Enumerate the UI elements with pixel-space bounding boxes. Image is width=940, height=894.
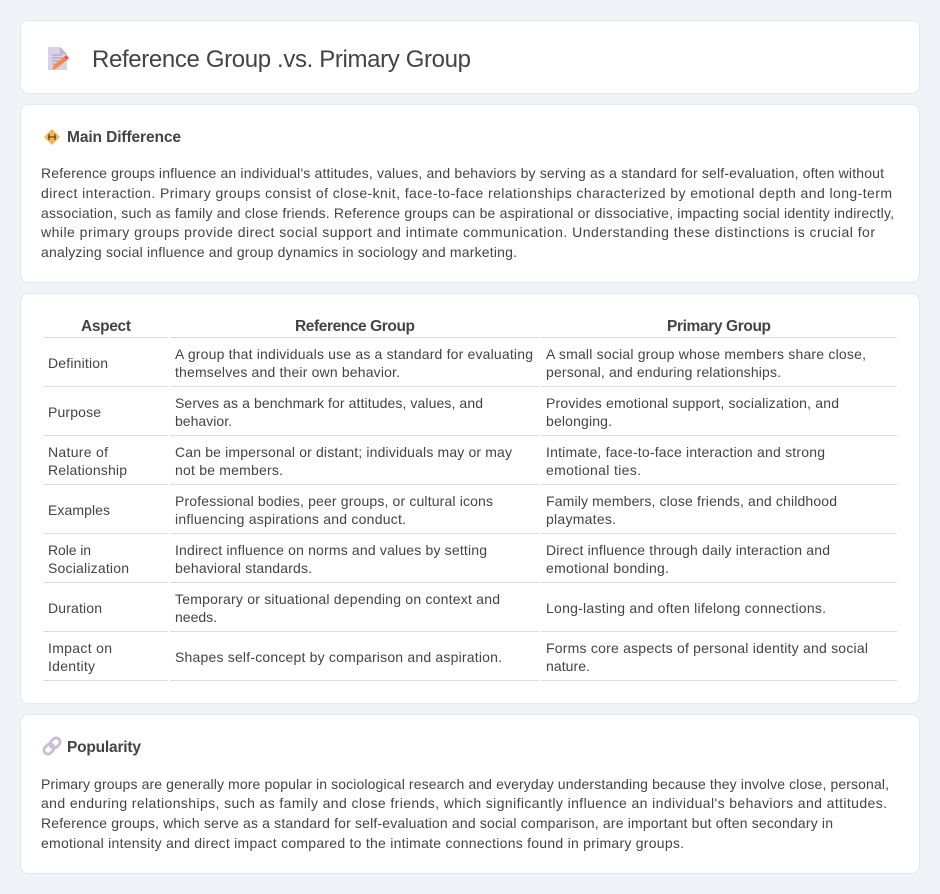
row: nature of relationship: emotional ties. [546,462,641,478]
row: duration: Long-lasting and often lifelong connections. [546,600,826,616]
row: role in socialization: Indirect influence on norms and values by setting [175,542,487,558]
row: duration: Temporary or situational depending on context and [175,591,500,607]
row: definition: Definition [48,355,108,371]
row: examples: influencing aspirations and conduct. [175,511,406,527]
row: impact on identity: Forms core aspects of personal identity and social [546,640,868,656]
text block: main difference: while primary groups provide direct social support and intimate communication. Understanding these distinctions is crucial for [40,224,875,240]
row: duration: needs. [175,609,217,625]
row: nature of relationship: not be members. [175,462,283,478]
icon: chain link [42,736,62,756]
text block: popularity: Primary groups are generally more popular in sociological research and everyday understanding because they involve close, personal, [41,776,889,792]
table header [81,318,771,335]
row: definition: A group that individuals use as a standard for evaluating [175,346,533,362]
table header: Reference Group [295,318,415,335]
text block: popularity [41,776,889,851]
text block: main difference: Reference groups influence an individual's attitudes, values, and behaviors by serving as a standard for self-evaluation, often without [41,165,884,181]
icon: diamond sign [44,129,60,145]
row: purpose: behavior. [175,413,232,429]
row: definition: themselves and their own behavior. [175,364,400,380]
table header: Aspect [81,318,131,335]
heading: main difference: Main Difference [67,129,181,146]
row: role in socialization: Direct influence through daily interaction and [546,542,830,558]
text block: main difference: direct interaction. Primary groups consist of close-knit, face-to-face relationships characterized by emotional depth and long-term [41,185,892,201]
row: examples: Professional bodies, peer groups, or cultural icons [175,493,493,509]
row: impact on identity [48,640,868,674]
row: examples: Family members, close friends, and childhood [546,493,837,509]
row: role in socialization: behavioral standards. [175,560,312,576]
row: impact on identity: Impact on [48,640,112,656]
text block: main difference [40,165,894,260]
row: impact on identity: nature. [546,658,590,674]
heading: popularity: Popularity [67,739,141,756]
text block: popularity: Reference groups, which serve as a standard for self-evaluation and social comparison, are important but often secondary in [41,815,833,831]
title: Reference Group .vs. Primary Group [92,46,471,73]
row: definition [48,346,866,380]
row: examples: playmates. [546,511,616,527]
row: impact on identity: Shapes self-concept by comparison and aspiration. [175,649,502,665]
header panel [20,20,920,94]
panel: main difference [20,104,920,282]
row: purpose: Serves as a benchmark for attitudes, values, and [175,395,483,411]
row: purpose: Provides emotional support, socialization, and [546,395,839,411]
row: definition: A small social group whose members share close, [546,346,866,362]
row: examples [48,493,837,527]
row: nature of relationship: Relationship [48,462,127,478]
row: nature of relationship: Intimate, face-to-face interaction and strong [546,444,825,460]
text block: popularity: emotional intensity and direct impact compared to the intimate connections found in primary groups. [41,835,684,851]
text block: main difference: association, such as family and close friends. Reference groups can be aspirational or dissociative, impacting social identity indirectly, [41,205,894,221]
row: purpose: Purpose [48,404,101,420]
row: impact on identity: Identity [48,658,95,674]
row: duration [48,591,826,625]
text block: main difference: analyzing social influence and group dynamics in sociology and marketing. [41,244,517,260]
row: role in socialization [48,542,830,576]
row: nature of relationship [48,444,825,478]
row: purpose [48,395,839,429]
row: role in socialization: emotional bonding. [546,560,669,576]
panel: comparison table [20,294,920,704]
text block: popularity: and enduring relationships, such as family and close friends, which significantly influence an individual's behaviors and attitudes. [41,795,887,811]
table header: Primary Group [667,318,771,335]
row: nature of relationship: Can be impersonal or distant; individuals may or may [175,444,512,460]
row: examples: Examples [48,502,110,518]
panel: popularity [20,714,920,874]
row: role in socialization: Socialization [48,560,129,576]
row: nature of relationship: Nature of [48,444,108,460]
icon: document with pencil [48,47,69,70]
row: purpose: belonging. [546,413,612,429]
row: duration: Duration [48,600,102,616]
row: role in socialization: Role in [48,542,91,558]
row: definition: personal, and enduring relationships. [546,364,781,380]
